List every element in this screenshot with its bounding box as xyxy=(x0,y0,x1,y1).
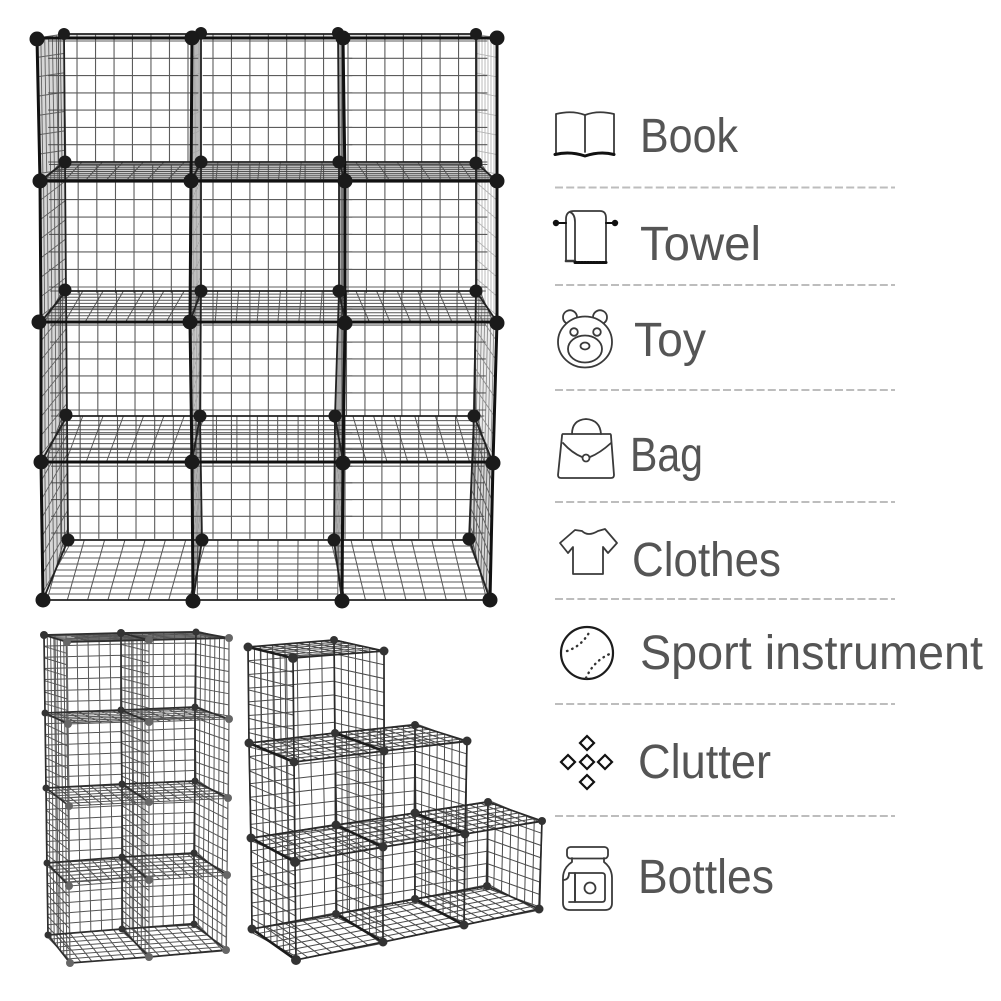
label: Clothes: Clothes xyxy=(632,534,781,587)
side wall meshes xyxy=(37,33,497,593)
divider xyxy=(555,284,895,286)
small stair-step wire cube rack xyxy=(244,636,546,965)
divider xyxy=(555,703,895,705)
thick cube edges xyxy=(248,647,465,960)
label: Toy: Toy xyxy=(634,314,706,367)
bottom rail and corner links xyxy=(40,162,497,601)
panel: storage uses list xyxy=(553,110,983,910)
item: toy xyxy=(558,310,706,368)
label: Clutter: Clutter xyxy=(638,736,771,789)
rack front posts xyxy=(67,638,229,963)
icon: handbag xyxy=(558,419,614,478)
back wall meshes xyxy=(48,34,487,539)
rack connector balls xyxy=(40,628,200,938)
icon: diamond cluster xyxy=(561,736,612,789)
small 2x4 wire cube rack xyxy=(40,628,233,967)
item: bag xyxy=(558,419,703,482)
divider xyxy=(555,501,895,503)
label: Bottles: Bottles xyxy=(638,851,774,904)
rack meshes xyxy=(44,632,229,963)
rack frame xyxy=(248,640,542,960)
label: Bag: Bag xyxy=(630,429,703,482)
item: book xyxy=(555,110,739,163)
icon: t-shirt xyxy=(560,529,617,574)
label: Sport instrument: Sport instrument xyxy=(640,627,983,680)
back frame bars xyxy=(64,33,476,540)
item: sport instrument xyxy=(561,627,983,680)
icon: towel on rail xyxy=(553,211,618,263)
divider xyxy=(555,815,895,817)
divider xyxy=(555,389,895,391)
rear connector balls xyxy=(58,27,482,546)
large 3x4 wire cube rack xyxy=(30,27,504,608)
rack meshes xyxy=(248,640,542,960)
icon: baseball xyxy=(561,627,613,679)
item: bottles xyxy=(563,847,774,910)
icon: open book xyxy=(555,112,614,156)
label: Book: Book xyxy=(640,110,739,163)
icon: jar xyxy=(563,847,612,910)
divider xyxy=(555,186,895,188)
side wall shading xyxy=(37,33,497,600)
rack connector balls xyxy=(244,636,546,965)
divider xyxy=(555,598,895,600)
item: clothes xyxy=(560,529,781,587)
icon: teddy bear face xyxy=(558,310,612,368)
rack frame xyxy=(44,632,229,963)
rack front connector balls xyxy=(63,634,233,967)
front frame bars xyxy=(37,38,497,601)
item: clutter xyxy=(561,736,771,789)
label: Towel: Towel xyxy=(640,218,761,271)
shelf meshes xyxy=(44,162,493,600)
front connector balls xyxy=(30,30,504,608)
item: towel xyxy=(553,211,761,271)
